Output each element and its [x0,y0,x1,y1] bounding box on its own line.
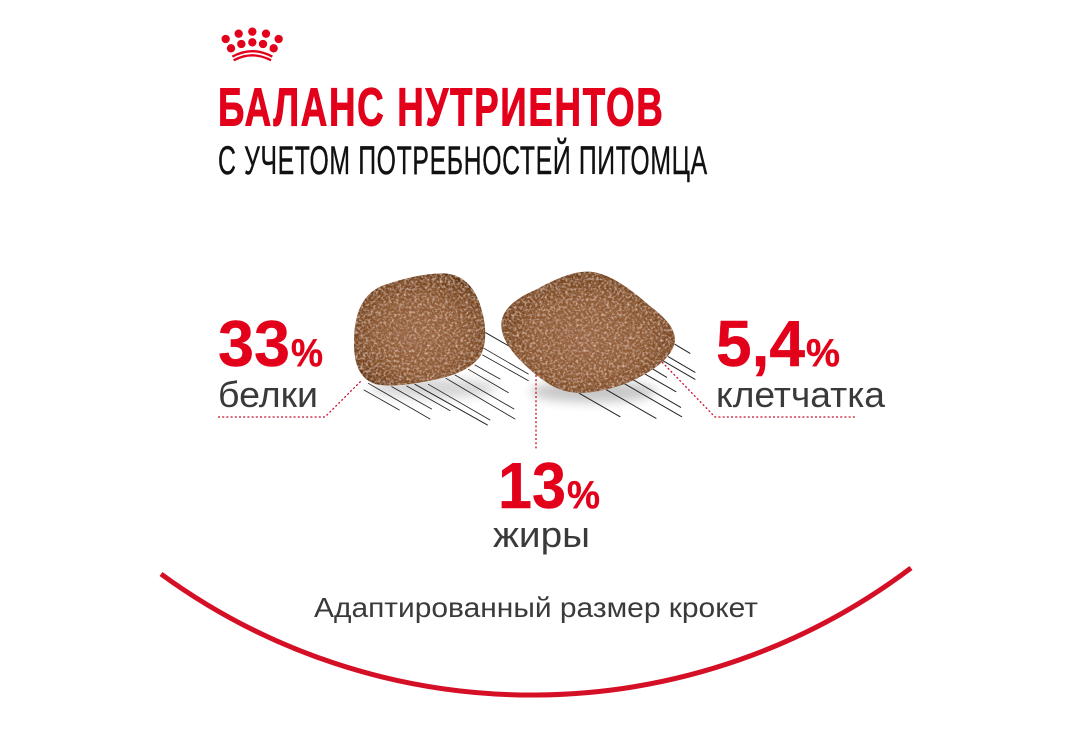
caption: Адаптированный размер крокет [314,592,758,623]
connector: fibre [662,362,856,417]
stat: fibre 5,4%: клетчатка [716,374,886,415]
connector: fat [535,375,537,450]
subtitle: С УЧЕТОМ ПОТРЕБНОСТЕЙ ПИТОМЦА [218,138,708,184]
title: БАЛАНС НУТРИЕНТОВ [218,76,663,137]
kibble: left [354,273,485,385]
kibble: right [501,272,675,393]
stat: protein 33%: 33 [218,307,290,380]
stat: protein 33% [218,307,323,415]
stat: fat 13%: % [567,474,600,517]
connector: protein [218,380,362,417]
icon: royal crown logo [221,27,283,60]
stat: protein 33%: белки [218,374,318,415]
stat: fibre 5,4%: % [806,332,840,375]
stat: fat 13% [493,449,600,555]
stat: fat 13%: 13 [498,449,566,522]
stat: fibre 5,4%: 5,4 [716,307,805,380]
red arc [161,568,911,695]
stat: fibre 5,4% [716,307,886,415]
stat: fat 13%: жиры [493,514,590,555]
illustration: two kibbles with shadow lines [354,272,695,425]
stat: protein 33%: % [291,332,323,375]
